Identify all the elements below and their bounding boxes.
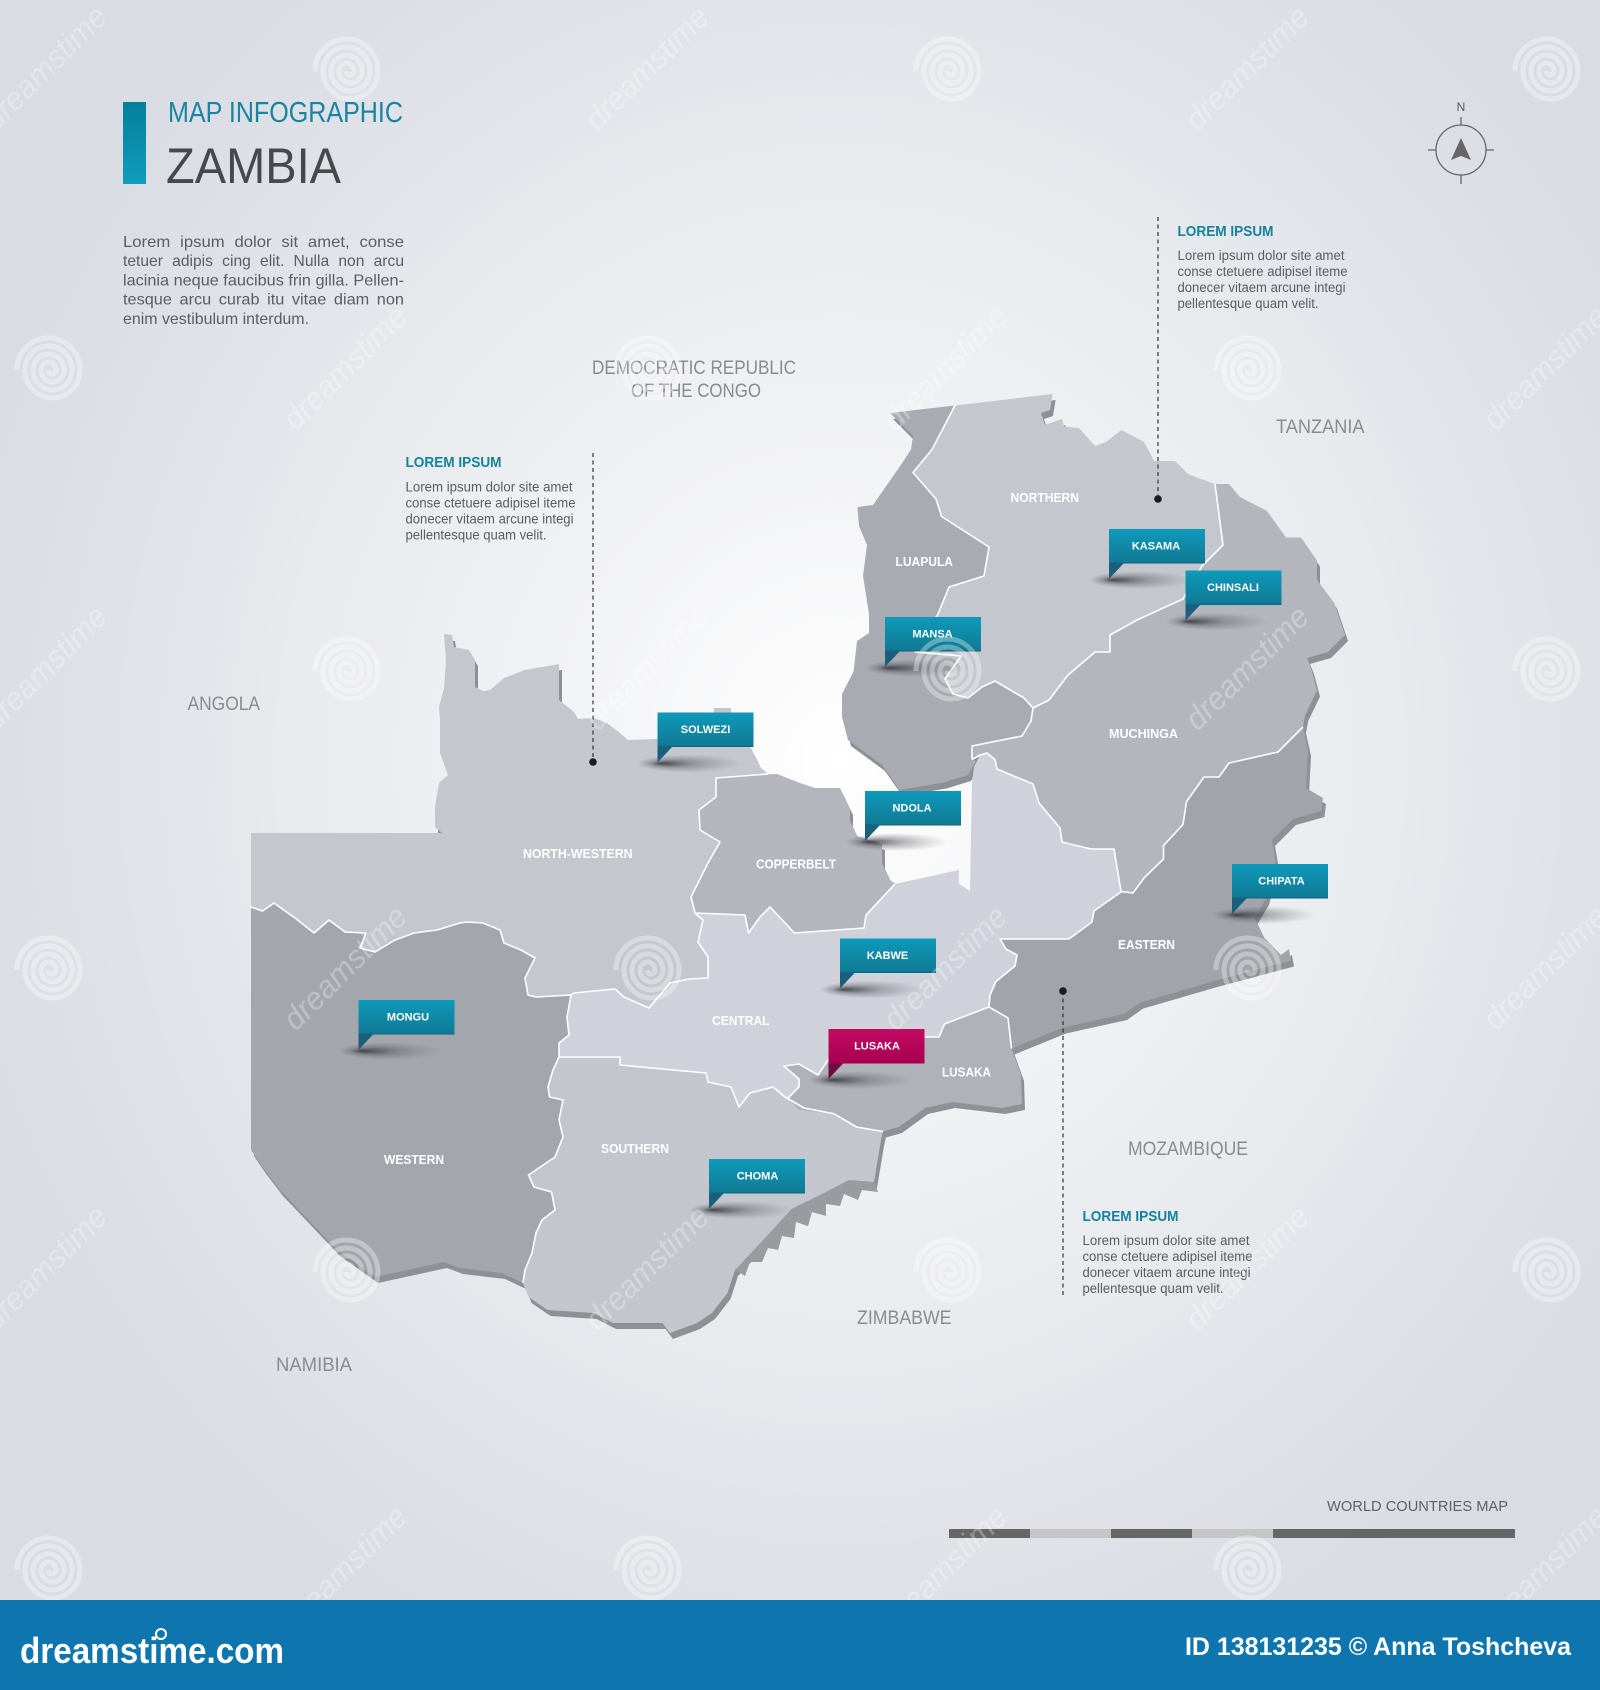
pin: Kasama: KASAMA: [1132, 540, 1180, 552]
region: western: [251, 903, 571, 1283]
intro paragraph: Lorem ipsum dolor sit amet, conse: [123, 234, 404, 251]
intro paragraph: tetuer adipis cing elit. Nulla non arcu: [123, 253, 404, 270]
region: northern: [913, 394, 1223, 708]
watermark text: dreamstime: [1177, 598, 1316, 737]
country labels: TANZANIA: [1276, 417, 1365, 438]
callout: top right: [1154, 217, 1348, 503]
pin: Mongu: MONGU: [387, 1012, 429, 1024]
title: ZAMBIA: [166, 138, 342, 194]
intro paragraph: tesque arcu curab itu vitae diam non: [123, 292, 404, 308]
watermark text: dreamstime: [875, 1498, 1014, 1637]
province labels: LUAPULA: [896, 554, 954, 569]
footer logo spiral: [156, 1629, 166, 1639]
footer logo text: dreamstime.com: [20, 1630, 284, 1671]
province labels: NORTHERN: [1010, 490, 1079, 505]
country labels: [188, 358, 1365, 1376]
pin: Kabwe: KABWE: [867, 950, 908, 962]
title accent bar: [123, 102, 146, 184]
pin: Mansa: [865, 617, 981, 677]
country labels: NAMIBIA: [276, 1355, 352, 1376]
watermark text: dreamstime: [275, 1498, 414, 1637]
callout: top right: LOREM IPSUM: [1178, 223, 1274, 240]
callout: bottom right: LOREM IPSUM: [1082, 1208, 1178, 1225]
country labels: DEMOCRATIC REPUBLIC: [592, 358, 796, 379]
province labels: EASTERN: [1118, 937, 1175, 952]
callout: bottom right: pellentesque quam velit.: [1082, 1281, 1224, 1296]
callout: top right: pellentesque quam velit.: [1178, 296, 1318, 311]
country labels: ZIMBABWE: [857, 1308, 952, 1329]
pin: Ndola: NDOLA: [892, 802, 932, 814]
callout: left: donecer vitaem arcune integi: [406, 512, 574, 526]
region: lusaka: [784, 1007, 1022, 1132]
region: eastern: [989, 727, 1323, 1048]
country labels: MOZAMBIQUE: [1128, 1139, 1248, 1160]
callout: left: [406, 453, 597, 766]
lake shore fragments: [735, 1180, 878, 1276]
icon: compass: [1428, 100, 1494, 184]
pin: Chinsali: CHINSALI: [1207, 582, 1259, 594]
province labels: LUSAKA: [942, 1064, 992, 1080]
callout: left: Lorem ipsum dolor site amet: [406, 480, 573, 494]
intro paragraph: enim vestibulum interdum.: [123, 311, 309, 328]
watermark text: dreamstime: [1177, 1198, 1316, 1337]
callout: bottom right: Lorem ipsum dolor site amet: [1082, 1233, 1250, 1248]
region: copperbelt: [691, 774, 896, 933]
watermark text: dreamstime: [875, 898, 1014, 1037]
callout: left: conse ctetuere adipisel iteme: [406, 496, 576, 510]
watermark text: dreamstime: [875, 298, 1014, 437]
callout: bottom right: conse ctetuere adipisel iteme: [1082, 1249, 1252, 1264]
pin: Choma: CHOMA: [737, 1170, 778, 1182]
intro paragraph: lacinia neque faucibus frin gilla. Pellen-: [123, 272, 404, 290]
map depth edge: [254, 400, 1348, 1339]
country labels: OF THE CONGO: [631, 381, 761, 402]
pin: Solwezi: SOLWEZI: [681, 724, 730, 736]
region: muchinga: [972, 484, 1345, 893]
callout: left: LOREM IPSUM: [406, 454, 502, 471]
watermark text: dreamstime: [577, 1198, 716, 1337]
scale bar: WORLD COUNTRIES MAP: [1327, 1498, 1508, 1515]
province labels: NORTH-WESTERN: [523, 846, 632, 861]
pin: Lusaka capital: [808, 1029, 924, 1089]
pin: Lusaka capital: LUSAKA: [854, 1040, 900, 1052]
callout: bottom right: [1059, 987, 1252, 1298]
province labels: CENTRAL: [712, 1013, 770, 1028]
province labels: [384, 490, 1179, 1167]
province labels: COPPERBELT: [756, 856, 836, 872]
footer credit: ID 138131235 © Anna Toshcheva: [1185, 1633, 1572, 1661]
intro paragraph: [123, 234, 404, 328]
footer band: [0, 1600, 1600, 1690]
pin: Mongu: [338, 1000, 454, 1060]
pin: Ndola: [845, 791, 961, 851]
country labels: ANGOLA: [188, 694, 260, 715]
pin: Chinsali: [1166, 570, 1282, 630]
pin: Kasama: [1089, 529, 1205, 589]
pin: Kabwe: [820, 938, 936, 998]
callout: bottom right: donecer vitaem arcune integi: [1082, 1265, 1250, 1280]
pin: Chipata: [1212, 864, 1328, 924]
region: central: [559, 753, 1121, 1107]
callout: top right: donecer vitaem arcune integi: [1178, 280, 1346, 295]
pin: Mansa: MANSA: [912, 628, 953, 640]
callout: left: pellentesque quam velit.: [406, 528, 546, 542]
icon: compass: N: [1457, 100, 1465, 114]
province labels: WESTERN: [384, 1152, 444, 1167]
province labels: MUCHINGA: [1109, 726, 1179, 741]
callout: top right: conse ctetuere adipisel iteme: [1178, 264, 1348, 279]
pin: Chipata: CHIPATA: [1258, 876, 1305, 888]
region: north-western: [251, 634, 768, 1008]
province labels: SOUTHERN: [601, 1141, 669, 1156]
region: luapula: [842, 406, 1033, 790]
pin: Choma: [689, 1159, 805, 1219]
pin: Solwezi: [638, 712, 754, 772]
watermark text: dreamstime: [275, 898, 414, 1037]
map of Zambia: [251, 394, 1348, 1339]
subtitle: MAP INFOGRAPHIC: [168, 97, 403, 129]
scale bar: [949, 1498, 1515, 1538]
watermark text: dreamstime: [577, 598, 716, 737]
title block: [123, 97, 403, 194]
watermark text: dreamstime: [275, 298, 414, 437]
region: southern: [523, 1057, 883, 1333]
callout: top right: Lorem ipsum dolor site amet: [1178, 248, 1345, 263]
